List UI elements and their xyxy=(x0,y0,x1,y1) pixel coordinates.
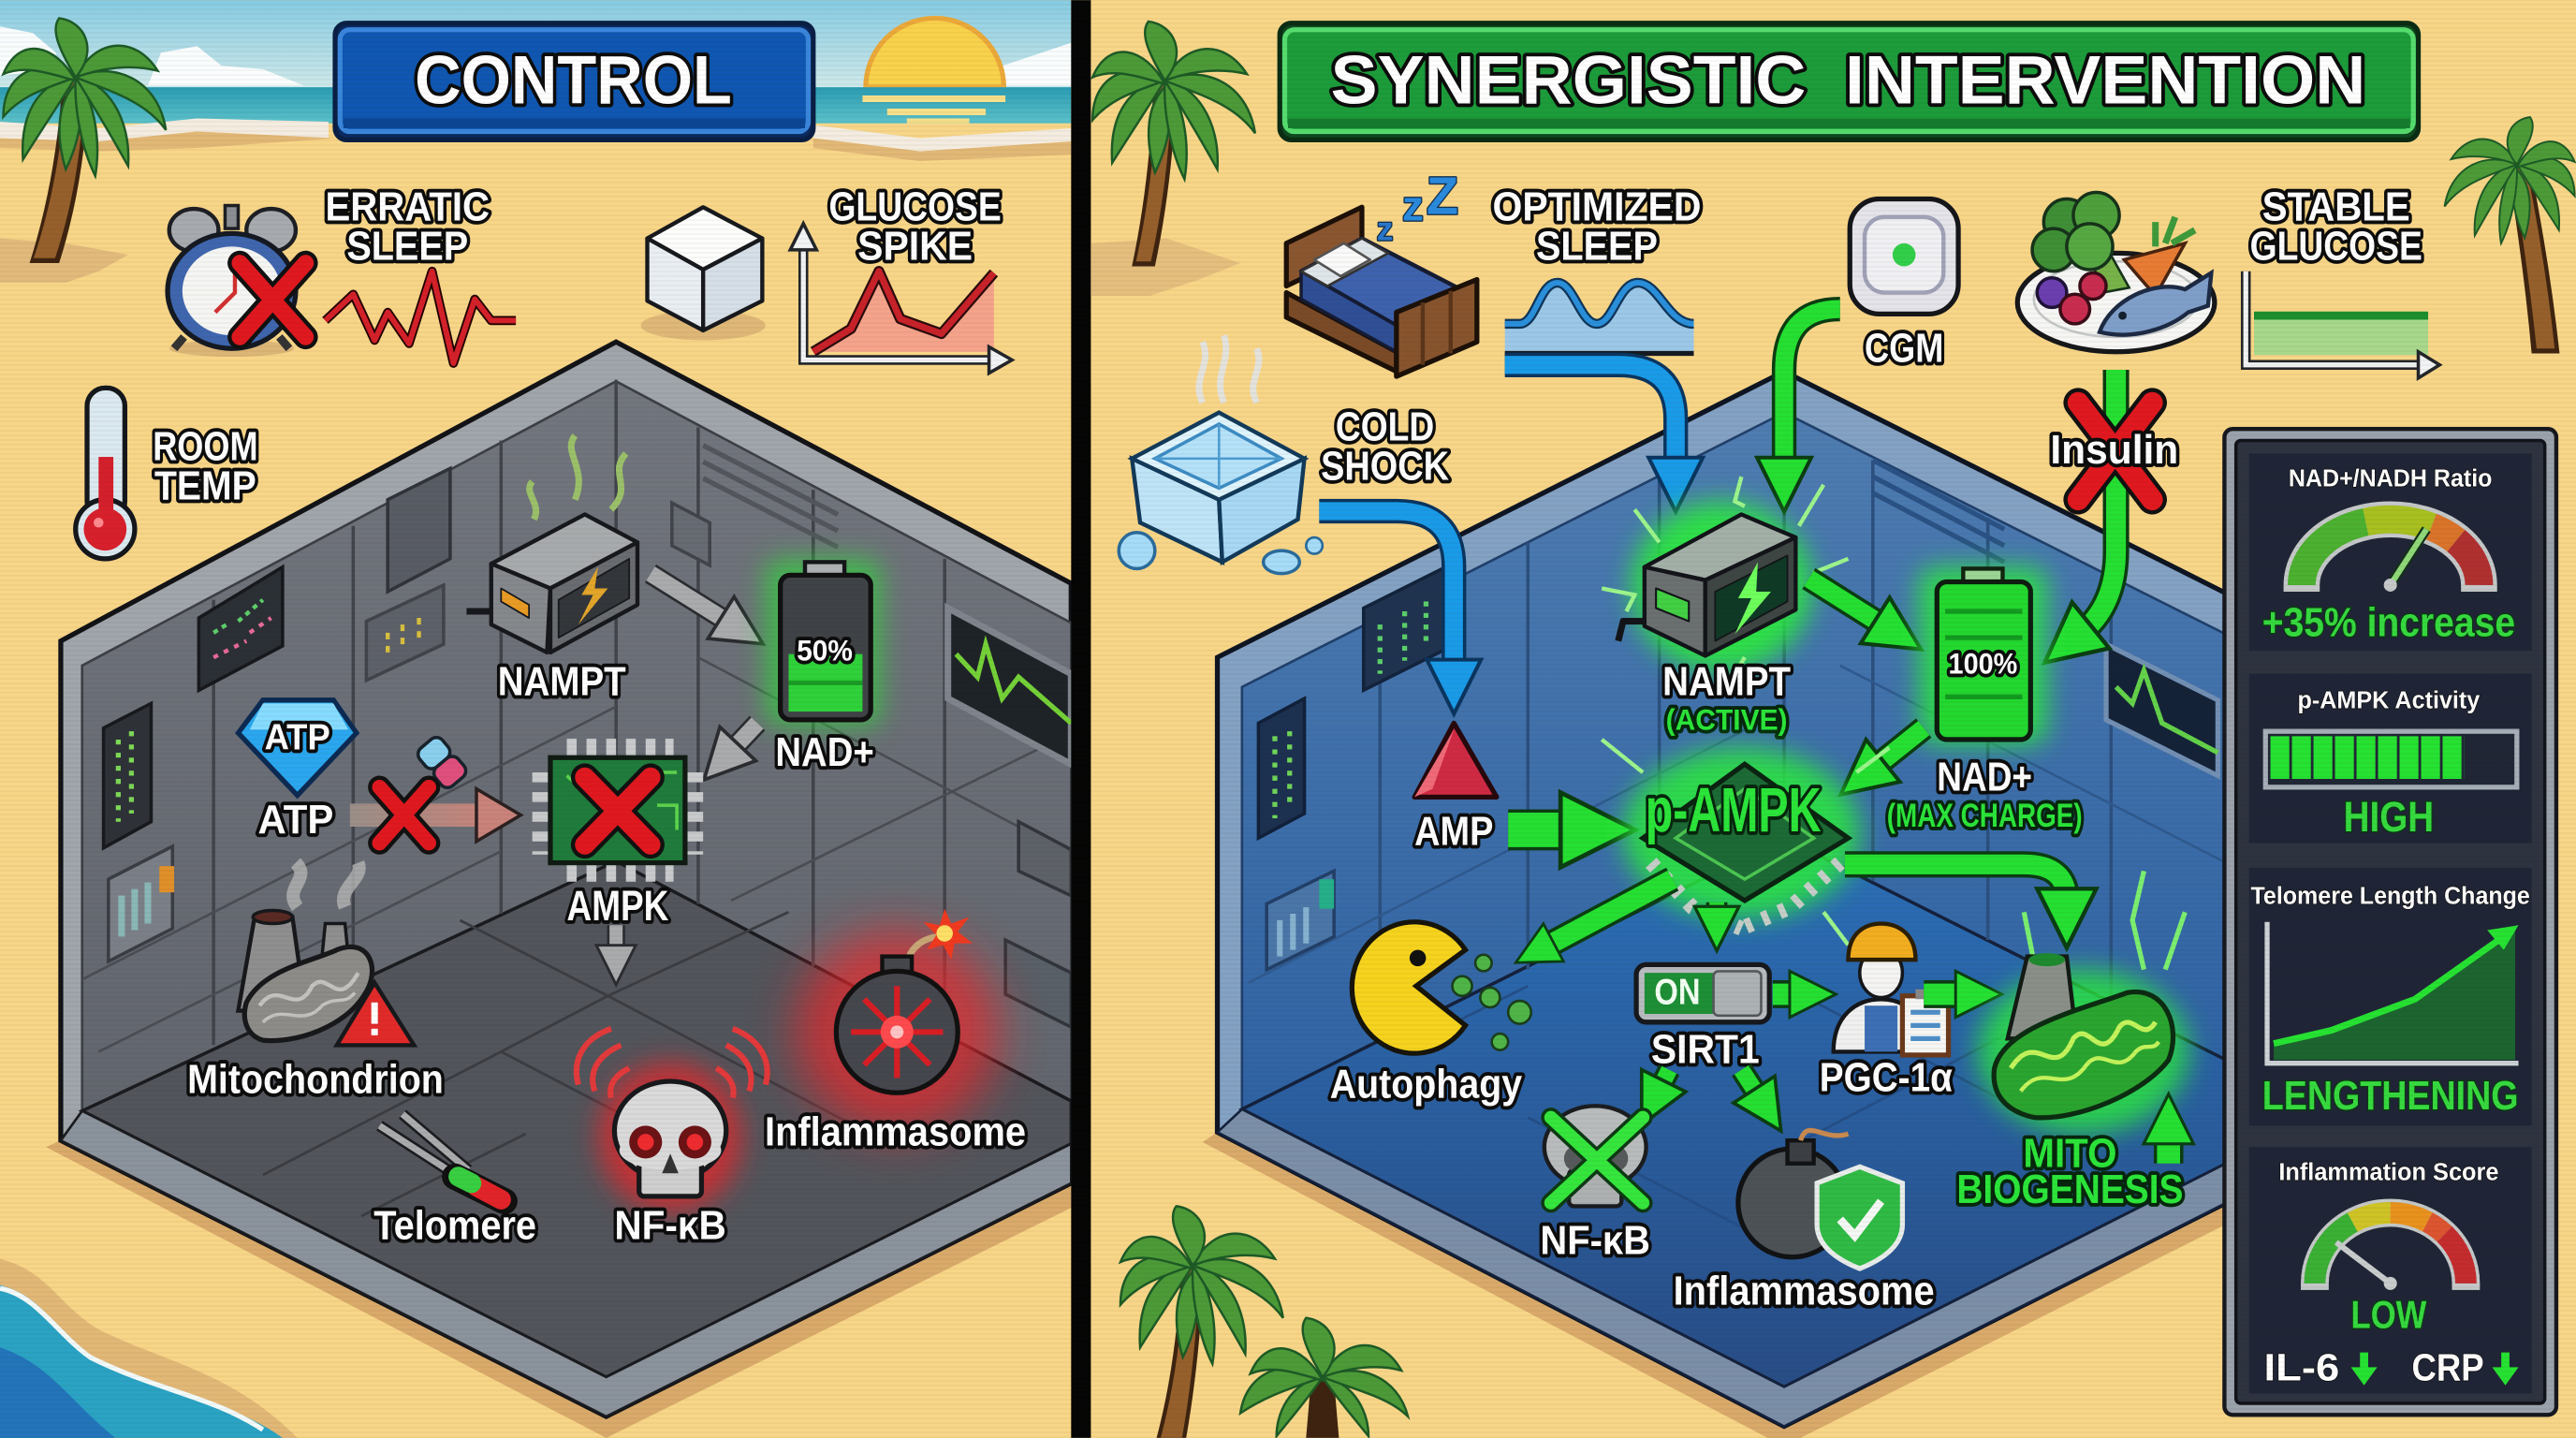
title: SYNERGISTIC INTERVENTION: SYNERGISTIC INTERVENTION xyxy=(1331,41,2365,119)
panel: control xyxy=(0,0,1071,1438)
icon: alarm clock with red X xyxy=(168,206,305,357)
arrow: mito upward xyxy=(2160,1134,2177,1164)
icon: NAD+ battery 50%: 50% xyxy=(797,634,853,668)
text: NAMPT (ACTIVE) xyxy=(1662,659,1791,736)
title: CONTROL xyxy=(335,23,813,139)
panel: results dashboard xyxy=(2224,429,2556,1415)
metric: p-AMPK activity xyxy=(2249,674,2532,844)
icon: p-AMPK chip: p-AMPK xyxy=(1646,776,1822,845)
icon: ice block xyxy=(1119,335,1323,574)
arrow: SIRT1 to inflammasome xyxy=(1741,1070,1760,1098)
arrow: p-AMPK to mitochondrion xyxy=(1845,864,2067,901)
text: ATP: ATP xyxy=(258,797,333,843)
arrow: NAMPT to NAD+ xyxy=(1808,579,1884,626)
icon: healthy food plate xyxy=(2017,192,2215,352)
metric: telomere length change: Telomere Length Change xyxy=(2250,881,2530,909)
divider xyxy=(1071,0,1090,1438)
icon: NAD+ battery 100% xyxy=(1919,567,2047,744)
metric: NAD+/NADH ratio xyxy=(2249,454,2532,651)
text: OPTIMIZED SLEEP xyxy=(1493,183,1701,269)
icon: glowing skull NF-kB xyxy=(577,1029,768,1212)
icon: SIRT1 switch ON xyxy=(1636,964,1769,1022)
text: NF-kB: NF-κB xyxy=(614,1202,726,1248)
text: PGC-1a: PGC-1α xyxy=(1820,1055,1953,1101)
text: NAMPT: NAMPT xyxy=(498,659,626,705)
text: MITO BIOGENESIS: MITO xyxy=(2023,1130,2116,1176)
text: ERRATIC SLEEP xyxy=(326,183,490,269)
arrow: PGC-1a to mitochondrion xyxy=(1924,986,1965,1002)
icon: NAD+ battery 100%: 100% xyxy=(1949,647,2017,681)
metric: inflammation score: CRP xyxy=(2411,1345,2484,1388)
arrow: CGM to NAMPT xyxy=(1784,309,1840,468)
arrow: p-AMPK to autophagy xyxy=(1546,879,1673,946)
text: OPTIMIZED SLEEP: OPTIMIZED xyxy=(1493,183,1701,229)
arrow: AMP to p-AMPK xyxy=(1508,818,1575,842)
icon: p-AMPK chip xyxy=(1602,740,1889,945)
text: NAD+ (MAX CHARGE): (MAX CHARGE) xyxy=(1887,798,2083,834)
text: COLD SHOCK: COLD xyxy=(1336,404,1434,450)
arrow: NAD+ to p-AMPK xyxy=(1875,728,1924,768)
text: ROOM TEMP xyxy=(153,424,258,509)
icon: AMPK chip disabled xyxy=(540,748,695,873)
icon: bed with z z z: z xyxy=(1402,182,1424,229)
arrow: SIRT1 to NF-kB xyxy=(1660,1070,1669,1090)
icon: active NAMPT box xyxy=(1602,477,1848,690)
title: CONTROL: CONTROL xyxy=(415,41,732,119)
text: Inflammasome: Inflammasome xyxy=(765,1108,1026,1154)
arrow: cold shock to AMP xyxy=(1319,511,1454,670)
palm tree xyxy=(4,18,166,263)
text: NAMPT (ACTIVE): (ACTIVE) xyxy=(1666,702,1788,736)
icon: bed with z z z: z xyxy=(1377,211,1393,247)
arrow: p-AMPK to SIRT1 xyxy=(1711,902,1723,916)
arrow: AMPK downward xyxy=(611,925,622,953)
room: isometric lab xyxy=(46,342,1071,1438)
icon: defused bomb with shield xyxy=(1738,1130,1902,1269)
text: ERRATIC SLEEP: ERRATIC xyxy=(326,183,490,229)
metric: inflammation score: IL-6 xyxy=(2264,1345,2339,1388)
metric: telomere length change: LENGTHENING xyxy=(2262,1073,2519,1119)
metric: inflammation score xyxy=(2249,1147,2532,1393)
text: COLD SHOCK: SHOCK xyxy=(1321,444,1449,490)
icon: pill xyxy=(415,734,469,791)
text: Inflammasome: Inflammasome xyxy=(1674,1269,1935,1314)
icon: pac-man autophagy xyxy=(1352,922,1531,1053)
chart: glucose spike xyxy=(790,224,1012,374)
icon: NAMPT box xyxy=(466,514,637,653)
text: ERRATIC SLEEP: SLEEP xyxy=(346,223,468,269)
metric: inflammation score: LOW xyxy=(2351,1292,2426,1336)
arrow: NAMPT to NAD+ xyxy=(651,574,729,623)
room: isometric blue lab xyxy=(1203,372,2226,1438)
text: AMP: AMP xyxy=(1414,808,1493,854)
text: Autophagy: Autophagy xyxy=(1330,1062,1523,1108)
icon: disabled skull NF-kB xyxy=(1544,1106,1647,1206)
text: STABLE GLUCOSE: STABLE xyxy=(2262,183,2410,229)
icon: telomere xyxy=(379,1114,505,1201)
chart: stable glucose xyxy=(2246,271,2439,378)
icon: thermometer xyxy=(76,388,135,559)
arrow: insulin path blocked xyxy=(2050,370,2178,633)
text: GLUCOSE SPIKE: SPIKE xyxy=(857,223,973,269)
metric: p-AMPK activity: p-AMPK Activity xyxy=(2298,686,2481,714)
title: SYNERGISTIC INTERVENTION xyxy=(1280,23,2419,139)
text: NAD+ (MAX CHARGE): NAD+ xyxy=(1937,754,2032,800)
icon: glowing mitochondrion xyxy=(1978,871,2188,1134)
icon: SIRT1 switch ON: ON xyxy=(1654,973,1701,1013)
text: MITO BIOGENESIS xyxy=(1956,1130,2184,1212)
arrow: NAD+ to AMPK xyxy=(731,723,757,751)
icon: CGM sensor xyxy=(1850,199,1958,314)
panel: synergistic intervention xyxy=(1090,22,2575,1438)
arrow: sleep to NAMPT xyxy=(1505,365,1676,468)
text: AMPK: AMPK xyxy=(567,882,668,930)
text: OPTIMIZED SLEEP: SLEEP xyxy=(1536,223,1658,269)
text: SIRT1: SIRT1 xyxy=(1651,1027,1760,1073)
metric: telomere length change xyxy=(2249,868,2532,1125)
text: STABLE GLUCOSE xyxy=(2250,183,2422,269)
chart: sleep wave xyxy=(1505,283,1694,353)
icon: PGC-1a worker xyxy=(1834,924,1949,1055)
text: NAMPT (ACTIVE): NAMPT xyxy=(1662,659,1791,705)
arrow: SIRT1 to PGC-1a xyxy=(1773,986,1799,1002)
beach scenery xyxy=(0,0,1071,1438)
metric: NAD+/NADH ratio: NAD+/NADH Ratio xyxy=(2289,464,2492,492)
icon: AMP triangle xyxy=(1414,723,1497,797)
metric: NAD+/NADH ratio: +35% increase xyxy=(2262,599,2515,645)
text: CGM: CGM xyxy=(1865,325,1943,371)
icon: damaged mitochondrion xyxy=(238,863,414,1045)
icon: glowing bomb inflammasome xyxy=(795,909,999,1134)
text: NF-kB: NF-κB xyxy=(1540,1217,1650,1263)
text: Mitochondrion: Mitochondrion xyxy=(187,1056,444,1102)
metric: inflammation score: Inflammation Score xyxy=(2278,1157,2499,1185)
arrow: ATP blocked xyxy=(350,787,520,844)
chart: erratic sleep trace xyxy=(326,271,516,363)
icon: NAD+ battery 50% xyxy=(766,559,881,726)
text: STABLE GLUCOSE: GLUCOSE xyxy=(2250,223,2422,269)
text: ROOM TEMP: ROOM xyxy=(153,424,258,470)
icon: ATP gem xyxy=(238,700,357,796)
text: GLUCOSE SPIKE xyxy=(828,183,1002,269)
icon: bed with z z z xyxy=(1286,166,1477,376)
text: NAD+: NAD+ xyxy=(775,729,874,775)
text: NAD+ (MAX CHARGE) xyxy=(1887,754,2083,834)
icon: sugar cube xyxy=(640,207,766,340)
icon: bed with z z z: Z xyxy=(1427,166,1458,225)
icon: ATP gem: ATP xyxy=(265,717,330,757)
text: ROOM TEMP: TEMP xyxy=(154,463,256,509)
arrow: insulin path blocked: Insulin xyxy=(2050,427,2178,473)
text: GLUCOSE SPIKE: GLUCOSE xyxy=(828,183,1002,229)
palm trees xyxy=(1090,22,2575,1438)
text: MITO BIOGENESIS: BIOGENESIS xyxy=(1956,1167,2184,1212)
text: COLD SHOCK xyxy=(1321,404,1449,490)
metric: p-AMPK activity: HIGH xyxy=(2344,793,2434,841)
icon: green fumes xyxy=(530,435,626,520)
text: Telomere: Telomere xyxy=(373,1202,536,1248)
